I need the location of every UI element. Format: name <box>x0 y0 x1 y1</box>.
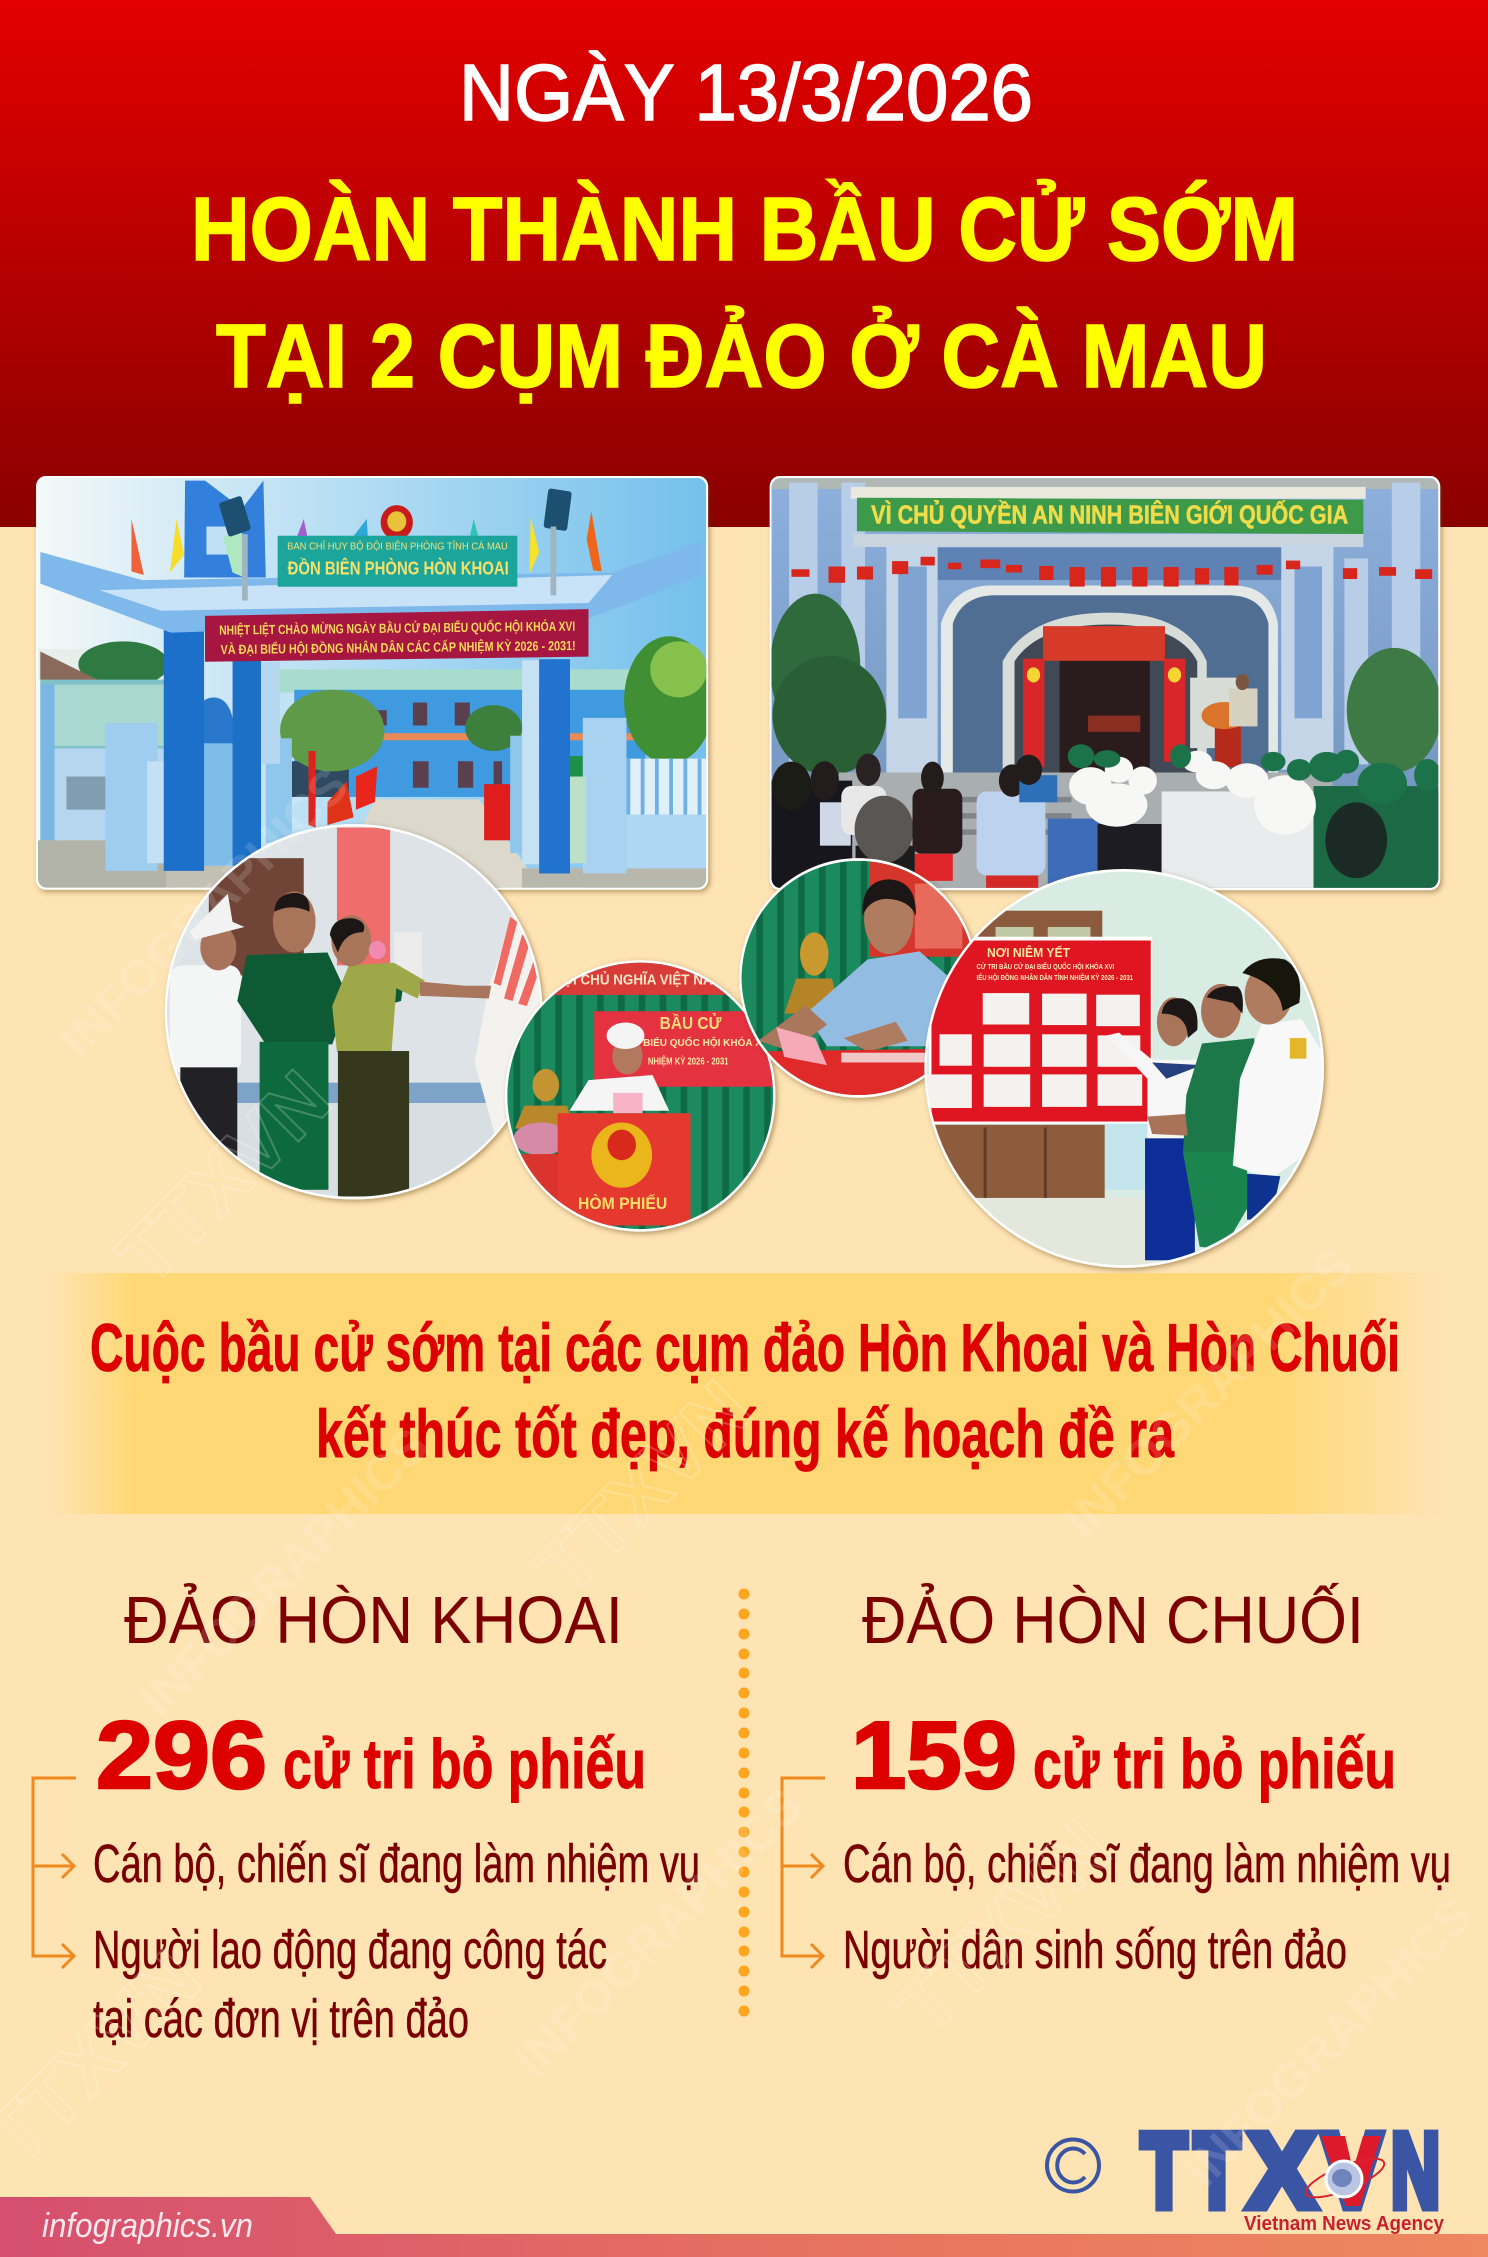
photo circle: officers at voter list board: IỂU HỘI ĐỒNG NHÂN DÂN TỈNH NHIỆM KỲ 2026 - 2031 <box>977 972 1133 982</box>
bust <box>800 932 828 976</box>
photo circle: sailor casting ballot: BIỂU QUỐC HỘI KHÓA XVI <box>643 1037 771 1049</box>
logo: TTXVN Vietnam News Agency: T <box>1194 2112 1240 2230</box>
photo circle: officers at voter list board: CỬ TRI BẦU CỬ ĐẠI BIỂU QUỐC HỘI KHÓA XVI <box>977 961 1114 971</box>
heading: ĐẢO HÒN KHOAI <box>124 1583 623 1658</box>
photo circle: officers at the notice wall <box>161 822 546 1200</box>
item 1: Cán bộ, chiến sĩ đang làm nhiệm vụ <box>93 1834 700 1894</box>
teal sign <box>278 536 517 587</box>
logo: TTXVN Vietnam News Agency: N <box>1391 2112 1440 2230</box>
headline line 1: HOÀN THÀNH BẦU CỬ SỚM <box>191 178 1298 280</box>
photo circle: sailor casting ballot: NHIỆM KỲ 2026 - 2031 <box>648 1055 729 1067</box>
green officer <box>1183 1038 1257 1155</box>
title <box>191 48 1298 407</box>
man in white uniform <box>170 965 241 1072</box>
photo circle: officers at voter list board: NƠI NIÊM YẾT <box>987 944 1071 960</box>
gate tower <box>184 481 266 578</box>
callout line 2: kết thúc tốt đẹp, đúng kế hoạch đề ra <box>316 1396 1175 1472</box>
crowd right <box>1048 819 1100 888</box>
header band <box>0 0 1488 527</box>
bust <box>533 1069 559 1102</box>
man in green uniform <box>237 953 349 1044</box>
table <box>767 1049 926 1095</box>
text: TTXVN <box>99 1054 347 1302</box>
photo circle: sailor casting ballot <box>503 960 779 1236</box>
text: INFOGRAPHICS <box>48 757 359 1068</box>
photo circle: voter at table <box>739 858 978 1098</box>
steps <box>839 772 1333 888</box>
panel: Hon Chuoi island <box>782 1582 1451 1980</box>
panel: Hon Khoai island <box>33 1583 700 2049</box>
text: INFOGRAPHICS <box>1053 1237 1364 1548</box>
heading: ĐẢO HÒN CHUỐI <box>862 1582 1364 1658</box>
photo: Hon Khoai border post gate: BAN CHỈ HUY BỘ ĐỘI BIÊN PHÒNG TỈNH CÀ MAU <box>287 540 508 553</box>
text: INFOGRAPHICS <box>128 1417 439 1728</box>
officer in white <box>1233 1019 1322 1179</box>
red welcome banner <box>205 609 589 662</box>
red board <box>929 937 1152 1124</box>
bracket arrows <box>782 1778 825 1968</box>
photo: ceremony in front of the border post: VÌ CHỦ QUYỀN AN NINH BIÊN GIỚI QUỐC GIA <box>871 499 1348 530</box>
notice poster <box>475 909 541 1139</box>
logo: TTXVN Vietnam News Agency: Vietnam News Agency <box>1244 2213 1445 2235</box>
voter count: 296 <box>96 1702 267 1809</box>
voter count: 159 <box>851 1702 1017 1809</box>
site name: infographics.vn <box>42 2207 253 2245</box>
icon: copyright <box>1047 2140 1099 2192</box>
dotted divider <box>738 1588 750 2016</box>
photo: Hon Khoai border post gate: NHIỆT LIỆT CHÀO MỪNG NGÀY BẦU CỬ ĐẠI BIỂU QUỐC HỘI KHÓA XVI <box>219 618 575 638</box>
ballot box <box>558 1113 691 1226</box>
photo circle: sailor casting ballot: BẦU CỬ <box>660 1014 721 1033</box>
crowd left <box>772 781 852 888</box>
photo: Hon Khoai border post gate: ĐỒN BIÊN PHÒNG HÒN KHOAI <box>288 557 509 579</box>
item 2: tại các đơn vị trên đảo <box>93 1989 469 2049</box>
text: TTXVN <box>519 1364 767 1612</box>
photo: ceremony in front of the border post <box>770 476 1442 890</box>
trees <box>772 594 860 700</box>
footer band <box>0 2197 1488 2257</box>
item 2 <box>93 1920 607 2049</box>
item 2: Người lao động đang công tác <box>93 1920 607 1980</box>
photo circle: sailor casting ballot: HÒM PHIẾU <box>578 1194 667 1213</box>
sailor <box>570 1075 669 1111</box>
logo: TTXVN Vietnam News Agency: X <box>1248 2112 1316 2230</box>
logo: TTXVN Vietnam News Agency <box>1141 2112 1445 2235</box>
photo: Hon Khoai border post gate <box>36 476 714 890</box>
man in olive uniform <box>332 963 425 1052</box>
date line: NGÀY 13/3/2026 <box>459 48 1033 137</box>
flag bunting <box>791 557 1432 587</box>
gate pillars <box>164 613 204 871</box>
text: INFOGRAPHICS <box>1173 1887 1484 2198</box>
photo circle: sailor casting ballot: HỘI CHỦ NGHĨA VIỆT NAM <box>553 970 724 988</box>
text: TTXVN <box>879 1804 1127 2052</box>
photo circle: officers at voter list board <box>924 867 1324 1268</box>
green sign <box>857 498 1363 534</box>
callout banner <box>50 1273 1440 1514</box>
voter label: cử tri bỏ phiếu <box>283 1725 646 1803</box>
logo: TTXVN Vietnam News Agency: V <box>1322 2112 1382 2230</box>
sailor <box>1107 1032 1197 1138</box>
text: INFOGRAPHICS <box>503 1777 814 2088</box>
emblem <box>380 505 413 536</box>
flags <box>131 519 144 575</box>
photo: Hon Khoai border post gate: VÀ ĐẠI BIỂU HỘI ĐỒNG NHÂN DÂN CÁC CẤP NHIỆM KỲ 2026 - 2031! <box>221 638 576 657</box>
headline line 2: TẠI 2 CỤM ĐẢO Ở CÀ MAU <box>216 305 1267 407</box>
man <box>810 951 948 1046</box>
bracket arrows <box>33 1778 76 1968</box>
gate roof <box>40 542 702 633</box>
logo: TTXVN Vietnam News Agency: T <box>1141 2112 1187 2230</box>
